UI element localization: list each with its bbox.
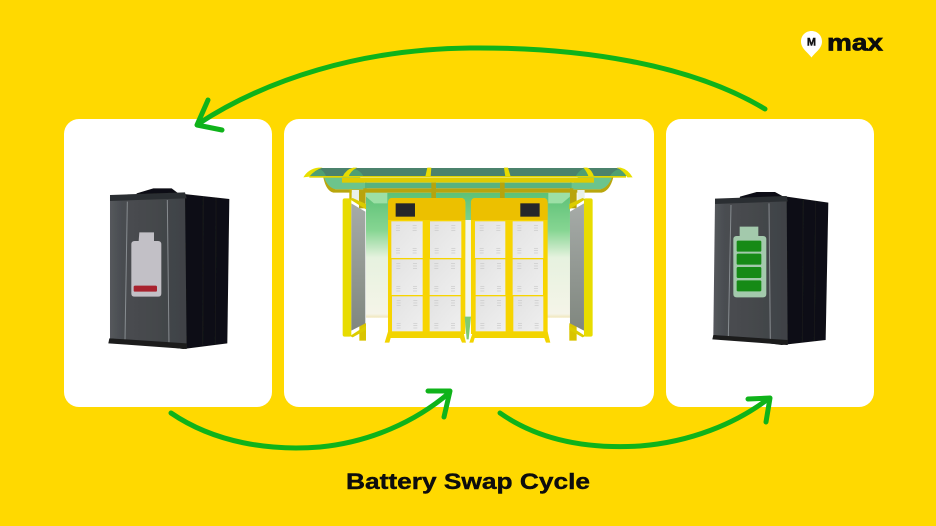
panel: swap station card	[284, 119, 654, 407]
station back glow wall	[366, 193, 570, 318]
left glass side panel	[343, 189, 366, 341]
left locker unit	[385, 198, 466, 343]
arrow: charged battery back to depleted battery	[197, 48, 765, 130]
icon: charged battery	[712, 192, 828, 345]
station roof	[303, 168, 633, 198]
icon: depleted battery	[108, 188, 229, 349]
right locker unit	[469, 198, 550, 343]
icon: map pin	[801, 31, 822, 58]
logo: max	[801, 30, 883, 58]
title: Battery Swap Cycle	[346, 469, 590, 494]
icon: M mark: M	[807, 36, 816, 48]
arrow: depleted battery to station	[171, 391, 450, 448]
illustration: battery swap station	[303, 168, 633, 343]
right glass side panel	[569, 190, 593, 341]
arrow: station to charged battery	[500, 398, 770, 447]
logo wordmark: max	[827, 30, 883, 56]
panel: charged battery card	[666, 119, 874, 407]
panel: depleted battery card	[64, 119, 272, 407]
